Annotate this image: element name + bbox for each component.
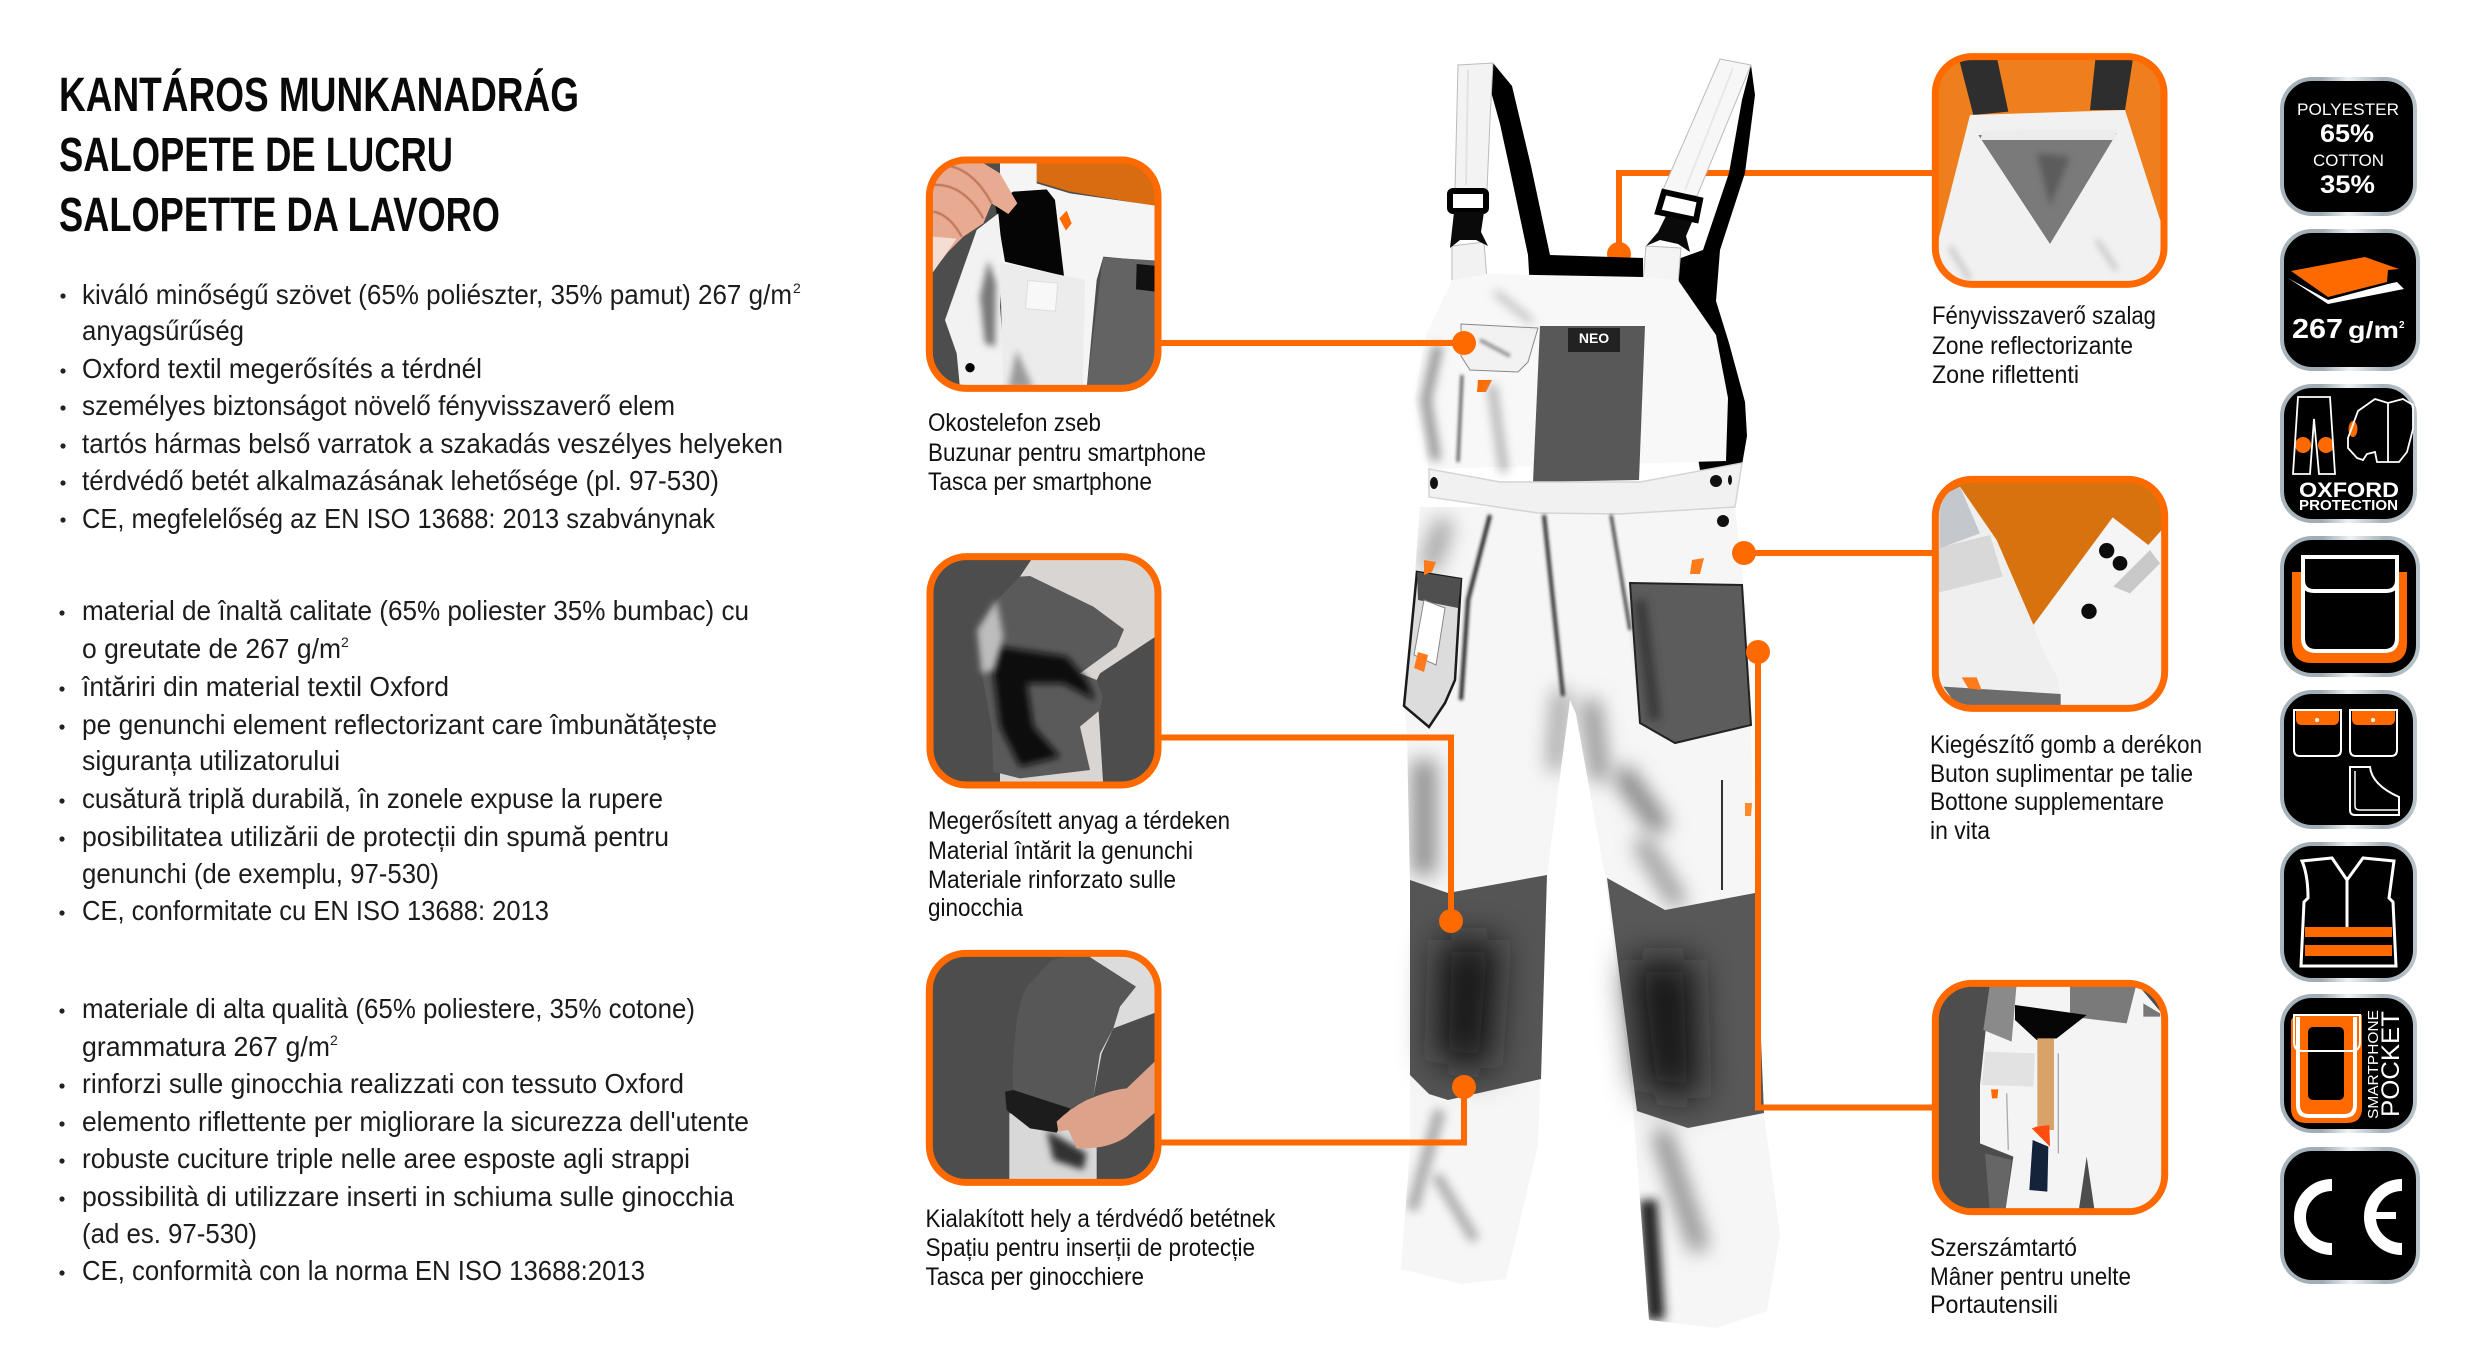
caption: reflective tape: Fényvisszaverő szalag — [1932, 302, 2156, 330]
title: SALOPETE DE LUCRU — [59, 129, 453, 182]
buckles — [1450, 191, 1700, 252]
NEO tag — [1568, 328, 1620, 352]
caption: extra waist button: Kiegészítő gomb a derékon — [1930, 731, 2202, 759]
pants body — [1401, 507, 1780, 1328]
text block: Hungarian features: CE, megfelelőség az EN ISO 13688: 2013 szabványnak — [82, 503, 716, 534]
text block: Romanian features: material de înaltă calitate (65% poliester 35% bumbac) cu — [82, 595, 749, 626]
buttons — [1430, 475, 1732, 527]
right thigh pocket gray — [1630, 583, 1751, 743]
text block: Italian features: (ad es. 97-530) — [82, 1218, 257, 1249]
caption: knee pad pocket: Spațiu pentru inserții de protecție — [926, 1234, 1255, 1262]
connector: extra button — [1732, 541, 1932, 565]
overalls illustration — [1401, 59, 1780, 1328]
text block: Romanian features: genunchi (de exemplu, 97-530) — [82, 858, 439, 889]
panel: knee pad pocket photo — [927, 950, 1160, 1183]
badge: fabric weight: 267 — [2292, 313, 2343, 344]
text block: Italian features: rinforzi sulle ginocchia realizzati con tessuto Oxford — [82, 1068, 684, 1099]
text block: Hungarian features: 2 — [793, 280, 801, 296]
text block: Italian features: grammatura 267 g/m — [82, 1031, 330, 1062]
caption: smartphone pocket: Buzunar pentru smartphone — [928, 439, 1206, 467]
text block: Romanian features: 2 — [341, 634, 349, 650]
chest pocket flap — [1461, 324, 1538, 372]
back straps in black — [1490, 63, 1643, 290]
badge: smartphone pocket — [2282, 996, 2415, 1131]
connector: tool holder — [1746, 640, 1932, 1108]
badge: reflective vest — [2282, 844, 2415, 980]
caption: reflective tape: Zone riflettenti — [1932, 361, 2079, 389]
bib — [1415, 274, 1728, 469]
left side tool pocket — [1404, 560, 1461, 727]
text block: Italian features: possibilità di utilizzare inserti in schiuma sulle ginocchia — [82, 1181, 734, 1212]
text block: Hungarian features: személyes biztonságot növelő fényvisszaverő elem — [82, 390, 675, 421]
badge: oxford protection — [2282, 386, 2415, 521]
text block: Hungarian features: tartós hármas belső varratok a szakadás veszélyes helyeken — [82, 428, 783, 459]
caption: extra waist button — [1930, 731, 2202, 845]
text block: Hungarian features: Oxford textil megerősítés a térdnél — [82, 353, 482, 384]
caption: knee pad pocket: Kialakított hely a térdvédő betétnek — [926, 1205, 1276, 1233]
panel: smartphone pocket photo — [927, 157, 1160, 390]
badge: fabric composition — [2282, 79, 2415, 214]
title — [59, 68, 579, 242]
caption: knee pad pocket — [926, 1205, 1276, 1291]
panel: reflective tape photo — [1933, 53, 2167, 287]
caption: extra waist button: Bottone supplementare — [1930, 788, 2164, 816]
text block: Italian features — [59, 993, 749, 1286]
text block: Romanian features: posibilitatea utilizării de protecții din spumă pentru — [82, 821, 669, 852]
badge: pockets — [2282, 692, 2415, 827]
panel: tool holder photo — [1933, 980, 2167, 1213]
caption: smartphone pocket — [928, 409, 1206, 496]
panel: extra waist button photo — [1933, 477, 2167, 710]
right back strap in black — [1670, 65, 1755, 470]
badge: fabric composition: 65% — [2320, 120, 2374, 148]
text block: Romanian features: întăriri din material textil Oxford — [81, 671, 449, 702]
caption: extra waist button: in vita — [1930, 817, 1990, 845]
text block: Romanian features: siguranța utilizatorului — [82, 745, 340, 776]
badge: flap pocket — [2282, 538, 2418, 675]
badge: oxford protection: PROTECTION — [2299, 498, 2398, 514]
text block: Romanian features: cusătură triplă durabilă, în zonele expuse la rupere — [82, 783, 663, 814]
front straps — [1452, 59, 1751, 284]
badge: oxford protection: OXFORD — [2299, 479, 2399, 502]
title: SALOPETTE DA LAVORO — [59, 189, 500, 242]
small orange tags — [1690, 558, 1704, 574]
caption: extra waist button: Buton suplimentar pe talie — [1930, 760, 2193, 788]
caption: tool holder: Portautensili — [1930, 1291, 2058, 1319]
badge: smartphone pocket: SMARTPHONE — [2365, 1010, 2382, 1119]
caption: tool holder: Mâner pentru unelte — [1930, 1263, 2131, 1291]
text block: Italian features: elemento riflettente per migliorare la sicurezza dell'utente — [82, 1106, 749, 1137]
caption: knee reinforcement: Megerősített anyag a térdeken — [928, 807, 1230, 835]
connector: phone pocket — [1161, 331, 1476, 355]
text block: Italian features: materiale di alta qualità (65% poliestere, 35% cotone) — [82, 993, 695, 1024]
text block: Italian features: 2 — [330, 1032, 338, 1048]
badge: fabric composition: 35% — [2320, 171, 2375, 199]
text block: Italian features: robuste cuciture triple nelle aree esposte agli strappi — [82, 1143, 690, 1174]
caption: knee reinforcement: Material întărit la genunchi — [928, 837, 1193, 865]
caption: smartphone pocket: Okostelefon zseb — [928, 409, 1101, 437]
caption: tool holder: Szerszámtartó — [1930, 1234, 2077, 1262]
badge: smartphone pocket: POCKET — [2377, 1011, 2405, 1117]
caption: tool holder — [1930, 1234, 2131, 1319]
panel: knee reinforcement photo — [927, 553, 1160, 787]
badge: CE mark — [2282, 1149, 2418, 1282]
text block: Italian features: CE, conformità con la norma EN ISO 13688:2013 — [82, 1255, 645, 1286]
caption: knee reinforcement: ginocchia — [928, 894, 1023, 922]
connector: reflective tape (behind overalls) — [1607, 173, 1932, 266]
caption: knee reinforcement: Materiale rinforzato sulle — [928, 866, 1176, 894]
caption: reflective tape: Zone reflectorizante — [1932, 332, 2133, 360]
badge: fabric composition: COTTON — [2313, 151, 2384, 170]
text block: Hungarian features — [60, 279, 801, 534]
text block: Hungarian features: kiváló minőségű szövet (65% poliészter, 35% pamut) 267 g/m — [82, 279, 792, 310]
badge: fabric weight — [2282, 231, 2418, 369]
caption: smartphone pocket: Tasca per smartphone — [928, 468, 1152, 496]
text block: Romanian features: o greutate de 267 g/m — [82, 633, 341, 664]
badge: fabric weight: g/m — [2348, 317, 2399, 343]
knee panels — [1410, 875, 1764, 1128]
text block: Romanian features: CE, conformitate cu EN ISO 13688: 2013 — [82, 895, 549, 926]
waistband — [1429, 463, 1742, 514]
bib shading — [1426, 292, 1532, 472]
text block: Romanian features — [59, 595, 749, 926]
text block: Hungarian features: térdvédő betét alkalmazásának lehetősége (pl. 97-530) — [82, 465, 719, 496]
NEO tag: NEO — [1579, 330, 1609, 346]
title: KANTÁROS MUNKANADRÁG — [59, 68, 579, 122]
pants shading — [1412, 515, 1722, 1320]
text block: Hungarian features: anyagsűrűség — [82, 315, 244, 346]
connector: knee pad pocket — [1161, 1075, 1476, 1142]
text block: Romanian features: pe genunchi element reflectorizant care îmbunătățește — [82, 709, 717, 740]
bib gray panel — [1533, 326, 1645, 482]
connector: knee reinforcement — [1161, 738, 1463, 933]
caption: reflective tape — [1932, 302, 2156, 389]
caption: knee pad pocket: Tasca per ginocchiere — [926, 1263, 1144, 1291]
badge: fabric weight: 2 — [2399, 320, 2405, 331]
caption: knee reinforcement — [928, 807, 1230, 922]
badge: fabric composition: POLYESTER — [2297, 100, 2399, 119]
